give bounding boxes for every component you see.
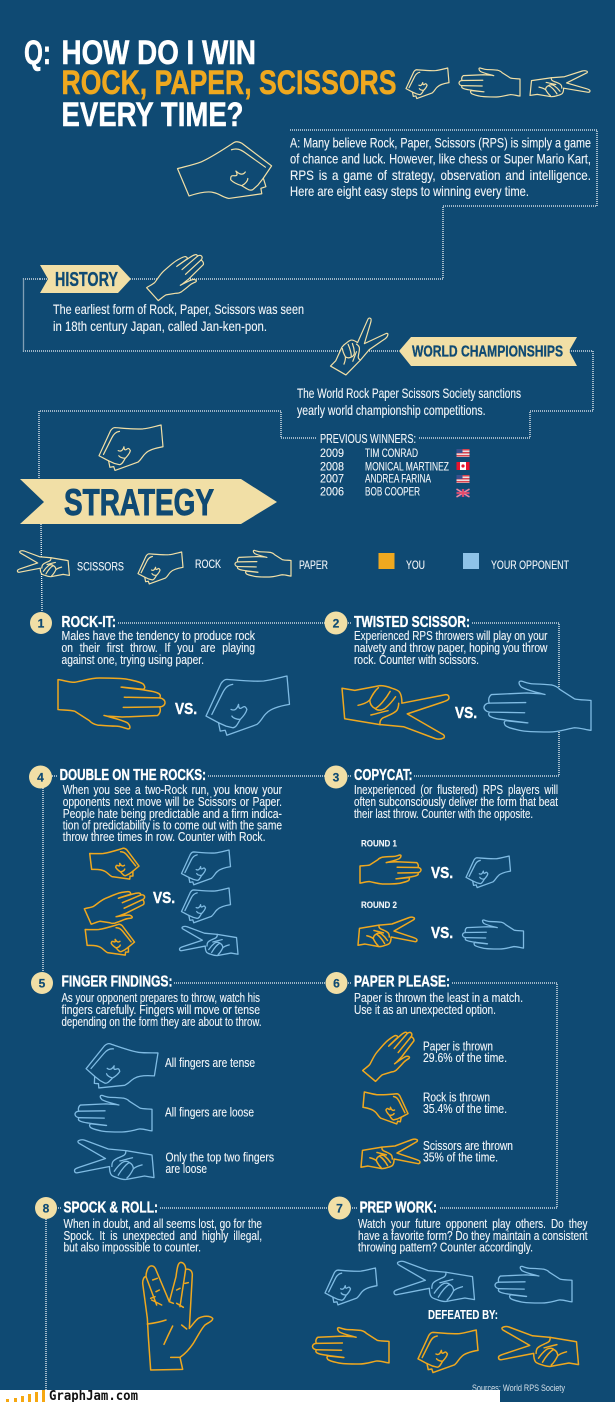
text: against one, trying using paper.	[62, 652, 204, 667]
stat: scissors: Scissors are thrown	[423, 1138, 513, 1153]
icon: you rock	[84, 920, 137, 962]
heading: SPOCK & ROLL:	[64, 1200, 158, 1217]
icon: you scissors	[498, 1326, 578, 1367]
stat: scissors	[423, 1138, 513, 1165]
badge 5: 5	[39, 976, 46, 990]
badge 2: 2	[333, 616, 340, 630]
legend: paper	[235, 550, 328, 577]
legend: rock	[138, 552, 221, 584]
legend: your opponent: YOUR OPPONENT	[491, 558, 569, 572]
text: rock. Counter with scissors.	[354, 652, 479, 667]
badge 3	[324, 766, 348, 788]
caption: are loose	[166, 1161, 207, 1176]
caption: All fingers are tense	[165, 1055, 255, 1070]
previous winners table: BOB COOPER	[365, 484, 420, 498]
title: EVERY TIME?	[62, 96, 244, 134]
text	[354, 782, 558, 821]
heading: FINGER FINDINGS:	[62, 974, 172, 991]
text: Spock. It is unexpected and highly illegal,	[64, 1228, 262, 1243]
badge 5	[31, 972, 53, 994]
panel 2: twisted scissor	[324, 612, 591, 739]
badge 6	[326, 972, 348, 994]
caption: All fingers are loose	[165, 1105, 254, 1120]
icon: tense rock	[82, 1037, 160, 1100]
heading: PAPER PLEASE:	[354, 974, 450, 991]
icon: opponent rock	[182, 888, 230, 923]
stat: rock: 35.4% of the time.	[423, 1101, 507, 1116]
text: but also impossible to counter.	[64, 1240, 201, 1255]
icon: vulcan salute hand	[143, 1262, 213, 1370]
flag: Canada	[456, 462, 470, 470]
round 2 label: ROUND 2	[361, 900, 397, 911]
text: Use it as an unexpected option.	[354, 1002, 496, 1017]
icon: you scissors	[342, 686, 449, 739]
flag: UK	[456, 489, 470, 497]
heading	[352, 612, 472, 631]
text	[354, 990, 523, 1017]
logo bars	[6, 1390, 45, 1402]
previous winners table	[317, 431, 470, 498]
text: throw three times in row. Counter with Rock.	[63, 829, 266, 844]
caption	[166, 1150, 274, 1176]
vs: VS.	[153, 890, 175, 907]
text: opponents next move will be Scissors or Paper.	[63, 794, 282, 809]
text	[64, 1216, 262, 1255]
answer text	[290, 134, 591, 199]
icon: title hands	[406, 68, 590, 99]
stat: scissors: 35% of the time.	[423, 1150, 498, 1165]
history text	[53, 301, 304, 334]
text	[354, 628, 548, 667]
panel 7: prep work	[312, 1196, 588, 1373]
text: depending on the form they are about to throw.	[62, 1014, 262, 1029]
badge 8	[35, 1197, 57, 1219]
round 1 label: ROUND 1	[361, 839, 398, 850]
icon: opponent rock	[206, 676, 290, 735]
icon: you paper	[58, 678, 165, 729]
vs: VS.	[455, 705, 477, 722]
icon: scissors	[361, 1139, 420, 1169]
text: As your opponent prepares to throw, watch his	[62, 990, 260, 1005]
legend: paper: PAPER	[299, 558, 328, 572]
panel 5: finger findings	[31, 972, 274, 1180]
heading	[357, 1197, 439, 1217]
badge 4	[29, 766, 52, 788]
world championships text	[297, 385, 521, 418]
badge 1: 1	[38, 616, 45, 630]
icon: opponent paper	[462, 920, 524, 949]
stat: rock: Rock is thrown	[423, 1090, 490, 1105]
icon: large rock beside answer	[175, 129, 281, 224]
legend: scissors	[17, 551, 124, 577]
previous winners table: 2006	[320, 484, 344, 498]
text: Males have the tendency to produce rock	[62, 628, 255, 643]
badge 8: 8	[43, 1202, 50, 1216]
icon: opponent scissors	[180, 926, 238, 956]
text: on their first throw. If you are playing	[62, 640, 255, 655]
heading: ROCK-IT:	[62, 614, 116, 631]
heading: TWISTED SCISSOR:	[354, 614, 470, 631]
footer bar	[0, 1389, 500, 1402]
vs: VS.	[175, 701, 197, 718]
title	[24, 34, 396, 134]
history banner	[40, 265, 131, 293]
legend: you: YOU	[406, 558, 425, 572]
text: When in doubt, and all seems lost, go for the	[64, 1216, 262, 1231]
legend: scissors: SCISSORS	[77, 560, 124, 574]
icon: paper	[362, 1024, 422, 1088]
heading	[61, 1197, 160, 1217]
heading: COPYCAT:	[354, 767, 412, 784]
previous winners table: TIM CONRAD	[365, 446, 418, 460]
text: tion of predictability is to come out with the same	[63, 818, 282, 832]
world championships text: yearly world championship competitions.	[297, 402, 486, 418]
vs: VS.	[431, 865, 453, 882]
title: ROCK, PAPER, SCISSORS	[62, 64, 396, 102]
badge 7	[328, 1196, 351, 1220]
text: When you see a two-Rock run, you know your	[63, 782, 283, 797]
heading	[352, 766, 414, 784]
heading: DOUBLE ON THE ROCKS:	[60, 767, 206, 784]
text: throwing pattern? Counter accordingly.	[358, 1240, 533, 1255]
sources: Sources: World RPS Society	[472, 1383, 565, 1393]
history text: The earliest form of Rock, Paper, Scissors was seen	[53, 301, 304, 317]
previous winners table: MONICAL MARTINEZ	[365, 460, 449, 474]
text	[358, 1216, 588, 1255]
badge 3: 3	[333, 770, 340, 784]
icon: history hand	[146, 246, 212, 309]
icon: you scissors	[358, 917, 417, 947]
text	[62, 990, 262, 1029]
strategy banner: STRATEGY	[64, 482, 214, 523]
panel 1: rock-it	[30, 612, 290, 735]
vs: VS.	[431, 925, 453, 942]
icon: opponent rock	[182, 850, 230, 885]
icon: world championships hand	[329, 314, 390, 383]
badge 7: 7	[336, 1202, 343, 1216]
title: Q:	[24, 34, 51, 72]
badge 4: 4	[37, 770, 44, 784]
icon: strategy rock	[99, 425, 163, 470]
icon: you rock	[418, 1330, 478, 1373]
answer text: Here are eight easy steps to winning every time.	[290, 183, 529, 199]
badge 2	[324, 612, 348, 634]
text: Experienced RPS throwers will play on your	[354, 628, 548, 643]
world championships banner	[399, 337, 577, 366]
icon: you paper	[84, 884, 150, 934]
stat: paper: 29.6% of the time.	[423, 1050, 507, 1065]
text: fingers carefully. Fingers will move or tense	[62, 1002, 260, 1017]
text: their last throw. Counter with the opposite.	[354, 806, 533, 821]
flag: USA	[456, 475, 470, 483]
icon: you paper	[312, 1328, 389, 1364]
text: People hate being predictable and a firm indica-	[63, 806, 282, 821]
heading: PREP WORK:	[360, 1200, 437, 1217]
legend	[17, 550, 569, 584]
panel 4: double on the rocks	[29, 766, 283, 962]
previous winners table: 2009	[320, 446, 344, 460]
badge 1	[30, 612, 52, 634]
badge 6: 6	[333, 976, 340, 990]
text	[62, 628, 255, 667]
world championships banner: WORLD CHAMPIONSHIPS	[412, 344, 563, 361]
text: often subconsciously deliver the form that beat	[354, 794, 558, 809]
icon: opponent rock	[325, 1268, 377, 1305]
legend: you	[378, 553, 425, 572]
history text: in 18th century Japan, called Jan-ken-pon.	[53, 318, 267, 334]
panel 3: copycat	[324, 766, 558, 949]
previous winners table: ANDREA FARINA	[365, 472, 431, 486]
previous winners table: 2008	[320, 460, 344, 474]
title: HOW DO I WIN	[62, 34, 256, 72]
caption: Only the top two fingers	[166, 1150, 274, 1165]
text: naivety and throw paper, hoping you throw	[354, 640, 548, 655]
previous winners table: 2007	[320, 472, 344, 486]
icon: opponent paper	[495, 1266, 572, 1303]
icon: opponent scissors	[394, 1261, 474, 1302]
history banner: HISTORY	[55, 269, 118, 291]
icon: you rock	[88, 844, 141, 886]
world championships text: The World Rock Paper Scissors Society sanctions	[297, 385, 521, 401]
legend: rock: ROCK	[195, 557, 221, 571]
icon: you paper	[360, 855, 421, 884]
defeated by label: DEFEATED BY:	[428, 1308, 498, 1322]
text: Paper is thrown the least in a match.	[354, 990, 523, 1005]
icon: loose paper	[75, 1095, 152, 1132]
icon: rock	[363, 1092, 408, 1124]
panel 8: spock and roll	[35, 1197, 262, 1370]
panel 6: paper please	[326, 972, 523, 1169]
stat: paper	[423, 1039, 507, 1065]
icon: opponent paper	[484, 681, 591, 732]
icon: opponent rock	[466, 856, 510, 888]
text	[63, 782, 283, 844]
icon: scissors	[75, 1140, 154, 1180]
flag: USA	[456, 449, 470, 457]
previous winners table: PREVIOUS WINNERS:	[320, 431, 416, 446]
stat: rock	[423, 1090, 507, 1116]
stat: paper: Paper is thrown	[423, 1039, 493, 1054]
legend: your opponent	[463, 553, 569, 572]
